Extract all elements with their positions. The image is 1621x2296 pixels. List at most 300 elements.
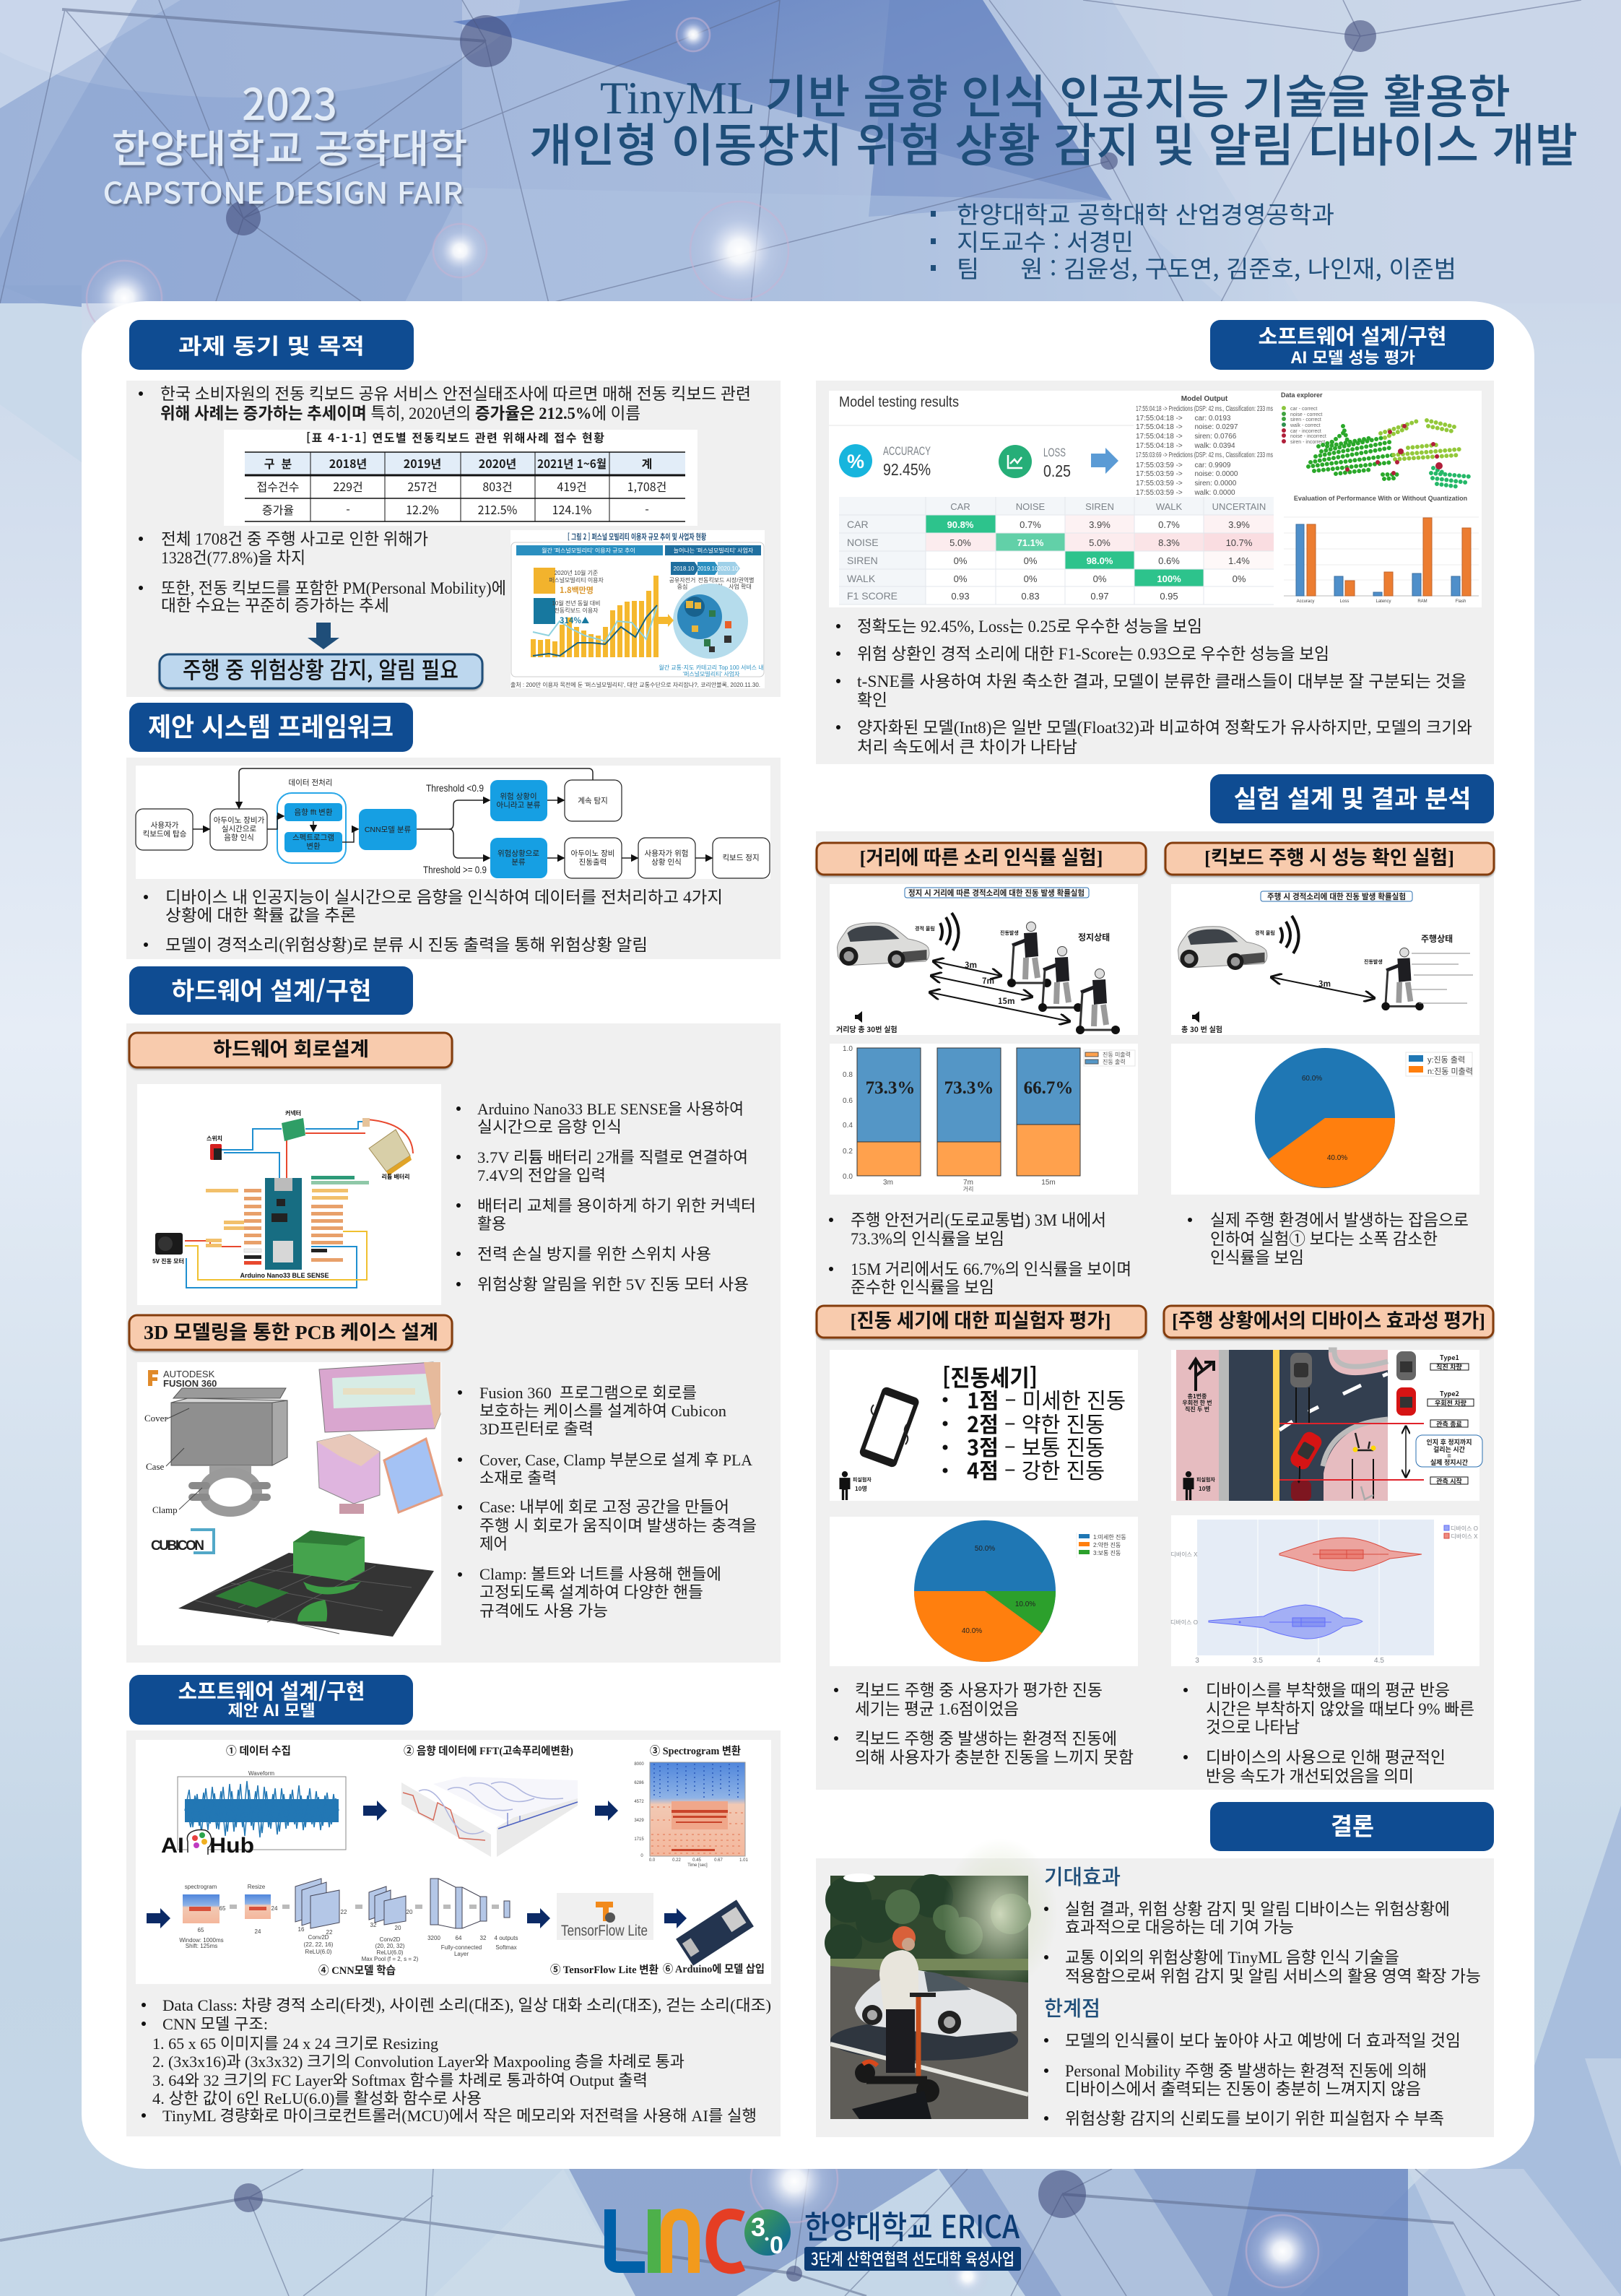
illustration: stationary distance test: 진동발생 xyxy=(1000,930,1019,937)
chart: personal mobility user trend: 전동킥보드 이용자 xyxy=(554,607,599,614)
illustration: road experiment scene: 우회전 차량 xyxy=(1435,1398,1467,1408)
subheading: circuit design xyxy=(129,1033,452,1067)
table: confusion matrix: 71.1% xyxy=(1017,537,1044,548)
text: expected effects: 실험 결과, 위험 상황 감지 및 알림 디바이스는 위험상황에 xyxy=(1065,1900,1450,1918)
table: confusion matrix: 90.8% xyxy=(947,519,974,530)
illustration: riding test: 진동발생 xyxy=(1364,958,1383,966)
table: confusion matrix: 8.3% xyxy=(1158,537,1180,548)
results: model testing dashboard: 17:55:04:18 -> walk: 0.0394 xyxy=(1136,442,1235,450)
chart: quantization performance bars: Accuracy xyxy=(1297,599,1314,604)
heading: motivation xyxy=(129,320,414,370)
chart: personal mobility user trend: 시장/권역별 xyxy=(726,576,755,584)
heading: AI performance: AI 모델 성능 평가 xyxy=(1290,345,1415,368)
diagram: AI model pipeline: 0 xyxy=(640,1854,643,1858)
table: confusion matrix: NOISE xyxy=(1016,501,1046,512)
diagram: AI model pipeline: Window: 1000ms xyxy=(179,1937,224,1944)
diagram: AI model pipeline: 20 xyxy=(407,1909,413,1915)
diagram: system flow: 상황 인식 xyxy=(651,858,682,867)
text: distance results: 주행 안전거리(도로교통법) 3M 내에서 xyxy=(851,1211,1106,1229)
panel: motivation background xyxy=(126,381,781,697)
chart: violin reaction time xyxy=(1170,1515,1479,1666)
text: AI model description: TinyML 경량화로 마이크로컨트롤러(MCU)에서 작은 메모리와 저전력을 사용해 AI를 실행 xyxy=(162,2107,757,2125)
illustration: road experiment scene: 우회전 한 번 xyxy=(1182,1399,1212,1407)
table: confusion matrix xyxy=(839,497,1274,605)
table: yearly harm cases: 2019년 xyxy=(404,454,441,472)
text: limitations: Personal Mobility 주행 중 발생하는 환경적 진동에 의해 xyxy=(1065,2062,1427,2080)
text: PM demand bullets: 또한, 전동 킥보드를 포함한 PM(Personal Mobility)에 xyxy=(161,579,506,597)
text: 3D case bullets xyxy=(458,1384,757,1620)
illustration: road experiment scene: 총1번중 xyxy=(1188,1392,1207,1400)
diagram: AI model pipeline: 24 xyxy=(255,1928,261,1935)
chart: riding pie 60/40: n:진동 미출력 xyxy=(1427,1067,1473,1076)
text: motivation statistics: 한국 소비자원의 전동 킥보드 공유 서비스 안전실태조사에 따르면 매해 전동 킥보드 관련 xyxy=(160,385,751,403)
diagram: AI model pipeline: 64 xyxy=(456,1935,462,1941)
diagram: AI model pipeline: 0.67 xyxy=(714,1858,723,1863)
illustration: riding test: 경적 울림 xyxy=(1255,930,1275,937)
chart: personal mobility user trend: 사업 확대 xyxy=(729,583,752,590)
diagram: system flow: 진동출력 xyxy=(579,858,607,867)
chart: recognition rate by distance: 66.7% xyxy=(1024,1078,1073,1098)
table: confusion matrix: SIREN xyxy=(1085,501,1114,512)
chart: personal mobility user trend: '퍼스널모빌리티' 사업자 xyxy=(683,670,740,677)
chart: personal mobility user trend: 314%▲ xyxy=(560,615,589,626)
text: distance results: 73.3%의 인식률을 보임 xyxy=(851,1230,1004,1248)
text: 3D case bullets: 고정되도록 설계하여 다양한 핸들 xyxy=(479,1583,703,1601)
text: device effectiveness results: 시간은 부착하지 않았을 때보다 9% 빠른 xyxy=(1206,1700,1474,1718)
text: distance results: 준수한 인식률을 보임 xyxy=(851,1278,994,1296)
chart: violin reaction time: 디바이스 O xyxy=(1451,1525,1478,1532)
text: vibration evaluation results xyxy=(834,1681,1134,1767)
text: riding results xyxy=(1188,1211,1469,1267)
subheading: device effectiveness evaluation: [주행 상황에서의 디바이스 효과성 평가] xyxy=(1172,1310,1485,1332)
diagram: AI model pipeline: Time [sec] xyxy=(687,1863,708,1868)
text: device effectiveness results xyxy=(1183,1681,1474,1785)
results: model testing dashboard: 17:55:04:18 -> siren: 0.0766 xyxy=(1136,433,1237,441)
chart: violin reaction time: 디바이스 X xyxy=(1451,1533,1478,1540)
table: confusion matrix: 98.0% xyxy=(1087,555,1113,566)
table: confusion matrix: 0% xyxy=(954,573,968,584)
diagram: AI model pipeline: Resize xyxy=(248,1884,266,1890)
image: 3D models of case: Case xyxy=(146,1461,165,1472)
chart: quantization performance bars: Loss xyxy=(1340,599,1349,604)
panel: experiments background xyxy=(816,831,1494,1790)
illustration: stationary distance test: 3m xyxy=(965,959,977,971)
text: AI model description: 4. 상한 값이 6인 ReLU(6.0)를 활성화 함수로 사용 xyxy=(152,2089,482,2107)
chart: personal mobility user trend: 2018.10 xyxy=(674,566,695,572)
illustration: road experiment scene: 인지 후 정지까지 xyxy=(1426,1437,1472,1447)
diagram: system flow: 사용자가 xyxy=(151,821,179,830)
chart: recognition rate by distance: 73.3% xyxy=(944,1078,994,1098)
text: AI performance bullets: 정확도는 92.45%, Loss는 0.25로 우수한 성능을 보임 xyxy=(857,618,1202,636)
heading: software AI model: 제안 AI 모델 xyxy=(228,1698,315,1721)
text: circuit bullets: Arduino Nano33 BLE SENSE을 사용하여 xyxy=(477,1100,744,1118)
table: confusion matrix: 3.9% xyxy=(1228,519,1250,530)
diagram: AI model pipeline: 16 xyxy=(298,1926,305,1933)
results: model testing dashboard: ACCURACY xyxy=(883,444,931,458)
text: AI performance bullets: 위험 상환인 경적 소리에 대한 F1-Score는 0.93으로 우수한 성능을 보임 xyxy=(857,645,1329,663)
heading: proposed framework xyxy=(129,703,413,752)
text: motivation statistics: 위해 사례는 증가하는 추세이며 특히, 2020년의 증가율은 212.5%에 이름 xyxy=(160,404,640,423)
illustration: vibration scale xyxy=(830,1350,1138,1501)
illustration: road experiment scene: Type1 xyxy=(1440,1353,1459,1362)
table: confusion matrix: 100% xyxy=(1157,573,1181,584)
illustration: riding test: 주행상태 xyxy=(1421,932,1453,945)
logo: LINC 3.0 Hanyang ERICA xyxy=(610,2201,1021,2273)
diagram: circuit wiring: 커넥터 xyxy=(285,1109,301,1117)
chart: vibration pie 50/40/10: 10.0% xyxy=(1015,1600,1035,1608)
image: 3D models of case: AUTODESK xyxy=(163,1369,215,1379)
illustration: stationary distance test: 15m xyxy=(998,995,1015,1007)
table: yearly harm cases: 구 분 xyxy=(264,454,292,472)
chart: personal mobility user trend: 월간 '퍼스널모빌리티' 이용자 규모 추이 xyxy=(542,547,635,554)
chart: quantization performance bars: Flash xyxy=(1456,599,1466,604)
header: fair title: CAPSTONE DESIGN FAIR xyxy=(103,169,464,212)
chart: violin reaction time: 3.5 xyxy=(1253,1657,1263,1665)
diagram: circuit wiring: 스위치 xyxy=(207,1135,222,1142)
subheading: device effectiveness evaluation xyxy=(1164,1306,1493,1338)
text: vibration evaluation results: 세기는 평균 1.6점이었음 xyxy=(855,1700,1019,1718)
chart: recognition rate by distance: 진동 출력 xyxy=(1103,1058,1126,1065)
illustration: road experiment scene: 걸리는 시간 xyxy=(1433,1444,1466,1454)
text: circuit bullets: 실시간으로 음향 인식 xyxy=(477,1118,622,1136)
subheading: 3D case design: 3D 모델링을 통한 PCB 케이스 설계 xyxy=(144,1322,438,1343)
text: 3D case bullets: 보호하는 케이스를 설계하여 Cubicon xyxy=(479,1402,726,1420)
results: model testing dashboard: 17:55:04:18 -> Predictions (DSP: 42 ms., Classification: 233 ms xyxy=(1136,405,1273,413)
table: yearly harm cases xyxy=(224,428,697,526)
text: PM demand bullets: 1328건(77.8%)을 차지 xyxy=(161,549,305,567)
team information list: 한양대학교 공학대학 산업경영공학과 xyxy=(957,196,1334,230)
illustration: stationary distance test: 정지상태 xyxy=(1078,931,1110,943)
results: model testing dashboard: 0.25 xyxy=(1043,462,1071,480)
chart: quantization performance bars: RAM xyxy=(1417,599,1427,604)
results: model testing dashboard xyxy=(829,391,1482,607)
text: circuit bullets: 배터리 교체를 용이하게 하기 위한 커넥터 xyxy=(477,1197,756,1215)
diagram: system flow: 음향 인식 xyxy=(224,833,254,842)
chart: violin reaction time: 디바이스 X xyxy=(1171,1551,1198,1558)
subheading: distance experiment: [거리에 따른 소리 인식률 실험] xyxy=(859,847,1103,869)
chart: vibration pie 50/40/10: 50.0% xyxy=(975,1545,995,1553)
results: model testing dashboard: Model Output xyxy=(1181,395,1228,403)
diagram: AI model pipeline: ⑤ TensorFlow Lite 변환 xyxy=(550,1964,659,1976)
chart: t-SNE data explorer: Data explorer xyxy=(1281,391,1323,399)
illustration: road experiment scene: 피실험자 xyxy=(1196,1476,1215,1483)
diagram: system flow: 아니라고 분류 xyxy=(497,801,541,810)
image: 3D models of case: CUBICON xyxy=(151,1538,204,1554)
heading: software AI model: 소프트웨어 설계/구현 xyxy=(178,1675,365,1705)
logo: LINC 3.0 Hanyang ERICA: 3단계 산학연협력 선도대학 육성사업 xyxy=(811,2245,1014,2270)
chart: recognition rate by distance: 15m xyxy=(1041,1179,1056,1187)
table: confusion matrix: 0.7% xyxy=(1020,519,1041,530)
table: confusion matrix: 5.0% xyxy=(1089,537,1111,548)
diagram: AI model pipeline: Fully-connected xyxy=(441,1944,482,1951)
image: 3D models of case: Clamp xyxy=(152,1504,178,1515)
chart: t-SNE data explorer: noise - correct xyxy=(1290,412,1322,417)
team information list xyxy=(931,196,1456,285)
chart: quantization performance bars: Latency xyxy=(1376,599,1391,604)
results: model testing dashboard: 17:55:03:59 -> walk: 0.0000 xyxy=(1136,489,1235,497)
chart: vibration pie 50/40/10 xyxy=(830,1517,1138,1666)
diagram: system flow: 아두이노 장비 xyxy=(571,849,614,858)
text: framework description: 모델이 경적소리(위험상황)로 분류 시 진동 출력을 통해 위험상황 알림 xyxy=(165,936,648,954)
diagram: system flow: 킥보드 정지 xyxy=(722,854,760,862)
chart: personal mobility user trend: 2020.10 xyxy=(718,566,739,572)
diagram: AI model pipeline: 65 xyxy=(198,1927,204,1933)
header: fair title: 한양대학교 공학대학 xyxy=(111,117,468,174)
illustration: riding test: 3m xyxy=(1318,978,1331,989)
heading: experiments: 실험 설계 및 결과 분석 xyxy=(1233,779,1472,815)
chart: t-SNE data explorer: siren - correct xyxy=(1290,417,1321,423)
table: confusion matrix: CAR xyxy=(847,519,869,530)
diagram: system flow: 분류 xyxy=(511,858,526,867)
panel: AI performance background xyxy=(816,381,1494,764)
diagram: AI model pipeline: 4572 xyxy=(634,1800,644,1804)
diagram: AI model pipeline: (20, 20, 32) xyxy=(375,1943,405,1949)
illustration: vibration scale: 3점 – 보통 진동 xyxy=(967,1430,1105,1462)
diagram: system flow: Threshold <0.9 xyxy=(426,782,484,794)
table: confusion matrix: 10.7% xyxy=(1226,537,1253,548)
illustration: vibration scale: 피실험자 xyxy=(853,1476,872,1483)
text: PM demand bullets: 대한 수요는 꾸준히 증가하는 추세 xyxy=(161,597,389,615)
chart: personal mobility user trend: 10월 전년 동월 대비 xyxy=(552,599,601,607)
illustration: riding test: 총 30 번 실험 xyxy=(1181,1023,1222,1034)
diagram: AI model pipeline: Waveform xyxy=(248,1770,274,1777)
table: yearly harm cases: 803건 xyxy=(482,477,513,495)
illustration: road experiment scene: 직진 차량 xyxy=(1436,1362,1463,1372)
diagram: AI model pipeline: ⑥ Arduino에 모델 삽입 xyxy=(663,1963,765,1975)
table: confusion matrix: WALK xyxy=(847,573,876,584)
text: AI performance bullets xyxy=(836,618,1472,756)
diagram: system flow: 위험상황으로 xyxy=(497,849,539,858)
table: yearly harm cases: 1,708건 xyxy=(627,477,666,495)
text: limitations: 디바이스에서 출력되는 진동이 충분히 느껴지지 않음 xyxy=(1065,2080,1421,2098)
table: confusion matrix: 0% xyxy=(1024,573,1038,584)
text: expected effects: 교통 이외의 위험상황에 TinyML 음향 인식 기술을 xyxy=(1065,1949,1399,1967)
text: device effectiveness results: 디바이스를 부착했을 때의 평균 반응 xyxy=(1206,1681,1450,1699)
table: yearly harm cases: 12.2% xyxy=(406,501,439,518)
diagram: AI model pipeline: ② 음향 데이터에 FFT(고속푸리에변환) xyxy=(404,1745,573,1757)
text: riding results: 실제 주행 환경에서 발생하는 잡음으로 xyxy=(1210,1211,1469,1229)
team information list: 팀 원 : 김윤성, 구도연, 김준호, 나인재, 이준범 xyxy=(957,250,1456,285)
diagram: circuit wiring xyxy=(137,1084,441,1305)
subheading: vibration evaluation: [진동 세기에 대한 피실험자 평가] xyxy=(851,1310,1111,1332)
heading: motivation: 과제 동기 및 목적 xyxy=(178,329,365,360)
table: confusion matrix: WALK xyxy=(1156,501,1183,512)
results: model testing dashboard: % xyxy=(847,451,864,472)
chart: recognition rate by distance: 0.6 xyxy=(843,1097,853,1105)
diagram: AI model pipeline: ④ CNN모델 학습 xyxy=(318,1964,396,1977)
diagram: AI model pipeline: 1.01 xyxy=(739,1858,748,1863)
text: device effectiveness results: 디바이스의 사용으로 인해 평균적인 xyxy=(1206,1749,1446,1767)
illustration: road experiment scene: 실제 정지시간 xyxy=(1430,1457,1469,1467)
illustration: stationary distance test: 거리당 총 30번 실험 xyxy=(836,1023,898,1034)
text: limitations: 위험상황 감지의 신뢰도를 보이기 위한 피실험자 수 부족 xyxy=(1065,2110,1444,2128)
diagram: AI model pipeline xyxy=(136,1740,771,1984)
text: motivation statistics xyxy=(139,385,751,423)
text: 3D case bullets: Fusion 360 프로그램으로 회로를 xyxy=(479,1384,697,1402)
text: 3D case bullets: 제어 xyxy=(479,1535,508,1553)
table: confusion matrix: 5.0% xyxy=(949,537,971,548)
text: device effectiveness results: 것으로 나타남 xyxy=(1206,1718,1300,1736)
illustration: road experiment scene: Type2 xyxy=(1440,1389,1459,1398)
callout: need for danger detection: 주행 중 위험상황 감지, 알림 필요 xyxy=(183,652,459,685)
table: yearly harm cases: 증가율 xyxy=(262,501,294,518)
text: 3D case bullets: 규격에도 사용 가능 xyxy=(479,1602,608,1620)
table: confusion matrix: 0% xyxy=(1093,573,1107,584)
text: PM demand bullets: 전체 1708건 중 주행 사고로 인한 위해가 xyxy=(161,530,428,548)
chart: personal mobility user trend: [ 그림 2 ] 퍼스널 모빌리티 이용자 규모 추이 및 사업자 현황 xyxy=(568,531,706,542)
results: model testing dashboard: 17:55:04:18 -> car: 0.0193 xyxy=(1136,415,1231,423)
chart: recognition rate by distance: 0.2 xyxy=(843,1148,853,1156)
text: 3D case bullets: 주행 시 회로가 움직이며 발생하는 충격을 xyxy=(479,1517,757,1535)
results: model testing dashboard: 17:55:04:18 -> noise: 0.0297 xyxy=(1136,423,1238,431)
table: confusion matrix: 0.6% xyxy=(1158,555,1180,566)
table: yearly harm cases: [표 4-1-1] 연도별 전동킥보드 관련 위해사례 접수 현황 xyxy=(306,428,604,446)
illustration: vibration scale: 4점 – 강한 진동 xyxy=(967,1453,1105,1485)
heading: hardware design: 하드웨어 설계/구현 xyxy=(172,971,371,1007)
heading: conclusion xyxy=(1210,1802,1494,1851)
diagram: circuit wiring: 5V 진동 모터 xyxy=(152,1257,184,1265)
text: expected effects: 효과적으로 대응하는 데 기여 가능 xyxy=(1065,1918,1294,1936)
diagram: system flow: 실시간으로 xyxy=(222,825,256,833)
chart: recognition rate by distance: 0.8 xyxy=(843,1071,853,1079)
heading: conclusion: 결론 xyxy=(1331,1807,1374,1842)
diagram: system flow xyxy=(136,766,770,879)
text: AI performance bullets: 확인 xyxy=(857,691,887,709)
chart: t-SNE data explorer: siren - incorrect xyxy=(1290,440,1325,445)
text: riding results: 인하여 실험① 보다는 소폭 감소한 xyxy=(1210,1230,1438,1248)
panel: hardware background xyxy=(126,1023,781,1663)
illustration: stationary distance test: 정지 시 거리에 따른 경적소리에 대한 진동 발생 확률실험 xyxy=(908,887,1085,898)
diagram: system flow: 계속 탐지 xyxy=(578,797,608,805)
results: model testing dashboard: 17:55:03:59 -> car: 0.9909 xyxy=(1136,462,1231,469)
chart: t-SNE data explorer: walk - correct xyxy=(1290,423,1321,428)
text: limitations xyxy=(1044,1992,1461,2128)
table: yearly harm cases: 2018년 xyxy=(329,454,367,472)
table: confusion matrix: 0.93 xyxy=(951,591,970,602)
subheading: 3D case design xyxy=(129,1315,452,1350)
chart: personal mobility user trend: 늘어나는 '퍼스널모빌리티' 사업자 xyxy=(674,547,754,554)
chart: recognition rate by distance: 7m xyxy=(963,1179,973,1187)
title xyxy=(529,61,1578,176)
title: 개인형 이동장치 위험 상황 감지 및 알림 디바이스 개발 xyxy=(529,109,1578,176)
heading: experiments xyxy=(1210,774,1494,823)
table: yearly harm cases: - xyxy=(645,501,649,518)
illustration: riding test: 주행 시 경적소리에 대한 진동 발생 확률실험 xyxy=(1267,891,1406,902)
illustration: riding test xyxy=(1171,884,1479,1035)
text: AI performance bullets: 양자화된 모델(Int8)은 일반 모델(Float32)과 비교하여 정확도가 유사하지만, 모델의 크기와 xyxy=(857,719,1472,737)
chart: violin reaction time: 디바이스 O xyxy=(1170,1619,1198,1626)
illustration: road experiment scene: 관측 시작 xyxy=(1436,1476,1463,1486)
diagram: circuit wiring: 리튬 배터리 xyxy=(381,1173,410,1180)
text: AI model description: 1. 65 x 65 이미지를 24 x 24 크기로 Resizing xyxy=(152,2035,438,2053)
diagram: AI model pipeline: 0.0 xyxy=(649,1858,656,1863)
photo: rider with scooter and car xyxy=(825,1838,1058,2119)
chart: t-SNE data explorer: noise - incorrect xyxy=(1290,434,1326,439)
chart: recognition rate by distance xyxy=(830,1044,1138,1195)
text: AI performance bullets: 처리 속도에서 큰 차이가 나타남 xyxy=(857,738,1077,756)
text: circuit bullets: 7.4V의 전압을 입력 xyxy=(477,1166,606,1184)
diagram: system flow: 변환 xyxy=(306,842,321,851)
text: expected effects: 적용함으로써 위험 감지 및 알림 서비스의 활용 영역 확장 가능 xyxy=(1065,1967,1481,1985)
table: yearly harm cases: 2020년 xyxy=(479,454,516,472)
chart: violin reaction time: 3 xyxy=(1195,1657,1199,1665)
chart: recognition rate by distance: 3m xyxy=(883,1179,893,1187)
diagram: AI model pipeline: ReLU(6.0) xyxy=(305,1949,332,1955)
diagram: system flow: 킥보드에 탑승 xyxy=(143,830,187,839)
table: yearly harm cases: 212.5% xyxy=(478,501,518,518)
chart: t-SNE data explorer: car - correct xyxy=(1290,407,1317,412)
table: yearly harm cases: 419건 xyxy=(557,477,587,495)
table: confusion matrix: 0% xyxy=(1024,555,1038,566)
subheading: riding experiment: [킥보드 주행 시 성능 확인 실험] xyxy=(1204,847,1454,869)
diagram: AI model pipeline: Shift: 125ms xyxy=(186,1943,217,1949)
diagram: system flow: Threshold >= 0.9 xyxy=(423,864,487,875)
illustration: road experiment scene xyxy=(1171,1350,1482,1501)
diagram: AI model pipeline: 32 xyxy=(480,1935,487,1941)
text: expected effects xyxy=(1044,1860,1481,1985)
text: distance results: 15M 거리에서도 66.7%의 인식률을 보이며 xyxy=(851,1260,1131,1278)
results: model testing dashboard: 17:55:03:69 -> Predictions (DSP: 42 ms., Classification: 233 ms xyxy=(1136,451,1273,459)
results: model testing dashboard: Model testing results xyxy=(839,394,959,410)
diagram: AI model pipeline: 8000 xyxy=(634,1762,644,1767)
chart: riding pie 60/40: 60.0% xyxy=(1302,1075,1322,1083)
illustration: vibration scale: 10명 xyxy=(855,1485,867,1493)
arrow: down xyxy=(308,623,339,649)
diagram: AI model pipeline: 65 xyxy=(220,1905,226,1912)
chart: personal mobility user trend: 2020년 10월 기준 xyxy=(555,569,598,576)
table: confusion matrix: 0.83 xyxy=(1021,591,1040,602)
subheading: circuit design: 하드웨어 회로설계 xyxy=(213,1039,369,1060)
diagram: AI model pipeline: 22 xyxy=(341,1909,347,1915)
text: 3D case bullets: Clamp: 볼트와 너트를 사용해 핸들에 xyxy=(479,1565,721,1583)
table: confusion matrix: 0.7% xyxy=(1158,519,1180,530)
chart: personal mobility user trend: 1.8백만명 xyxy=(560,584,594,596)
diagram: AI model pipeline: 0.45 xyxy=(692,1858,701,1863)
image: 3D models of case: Cover xyxy=(144,1413,168,1424)
text: circuit bullets: 전력 손실 방지를 위한 스위치 사용 xyxy=(477,1245,711,1263)
logo: LINC 3.0 Hanyang ERICA: 0 xyxy=(770,2232,783,2259)
table: confusion matrix: 3.9% xyxy=(1089,519,1111,530)
text: PM demand bullets xyxy=(139,530,506,615)
diagram: AI model pipeline: ReLU(6.0) xyxy=(377,1949,404,1956)
table: yearly harm cases: 124.1% xyxy=(552,501,592,518)
chart: personal mobility user trend: 중심 xyxy=(677,583,687,590)
chart: personal mobility user trend: 출처 : 200만 이용자 목전에 둔 '퍼스널모빌리티', 대안 교통수단으로 자리잡나?, 코리안블록, 2020.11.30. xyxy=(510,681,760,688)
illustration: road experiment scene: 관측 종료 xyxy=(1436,1419,1462,1429)
diagram: AI model pipeline: 32 xyxy=(370,1922,377,1928)
chart: recognition rate by distance: 진동 미출력 xyxy=(1103,1051,1131,1058)
table: confusion matrix: 0% xyxy=(954,555,968,566)
illustration: road experiment scene: 10명 xyxy=(1199,1485,1211,1493)
chart: riding pie 60/40 xyxy=(1171,1044,1479,1195)
diagram: system flow: 사용자가 위험 xyxy=(645,849,688,858)
table: confusion matrix: 1.4% xyxy=(1228,555,1250,566)
diagram: circuit wiring: Arduino Nano33 BLE SENSE xyxy=(240,1272,329,1279)
chart: recognition rate by distance: 73.3% xyxy=(866,1078,915,1098)
results: model testing dashboard: 17:55:03:59 -> noise: 0.0000 xyxy=(1136,470,1238,478)
header: fair title xyxy=(103,70,468,212)
table: yearly harm cases: 257건 xyxy=(407,477,438,495)
diagram: AI model pipeline: AI Hub xyxy=(161,1834,254,1858)
heading: software AI model xyxy=(129,1675,413,1725)
results: model testing dashboard: 92.45% xyxy=(883,460,931,479)
table: yearly harm cases: 계 xyxy=(642,454,652,472)
text: AI model description xyxy=(142,1996,771,2125)
white main panel xyxy=(82,301,1534,2169)
chart: vibration pie 50/40/10: 1:미세한 진동 xyxy=(1093,1533,1126,1541)
chart: t-SNE data explorer: car - incorrect xyxy=(1290,429,1321,434)
table: yearly harm cases: 접수건수 xyxy=(257,477,299,495)
